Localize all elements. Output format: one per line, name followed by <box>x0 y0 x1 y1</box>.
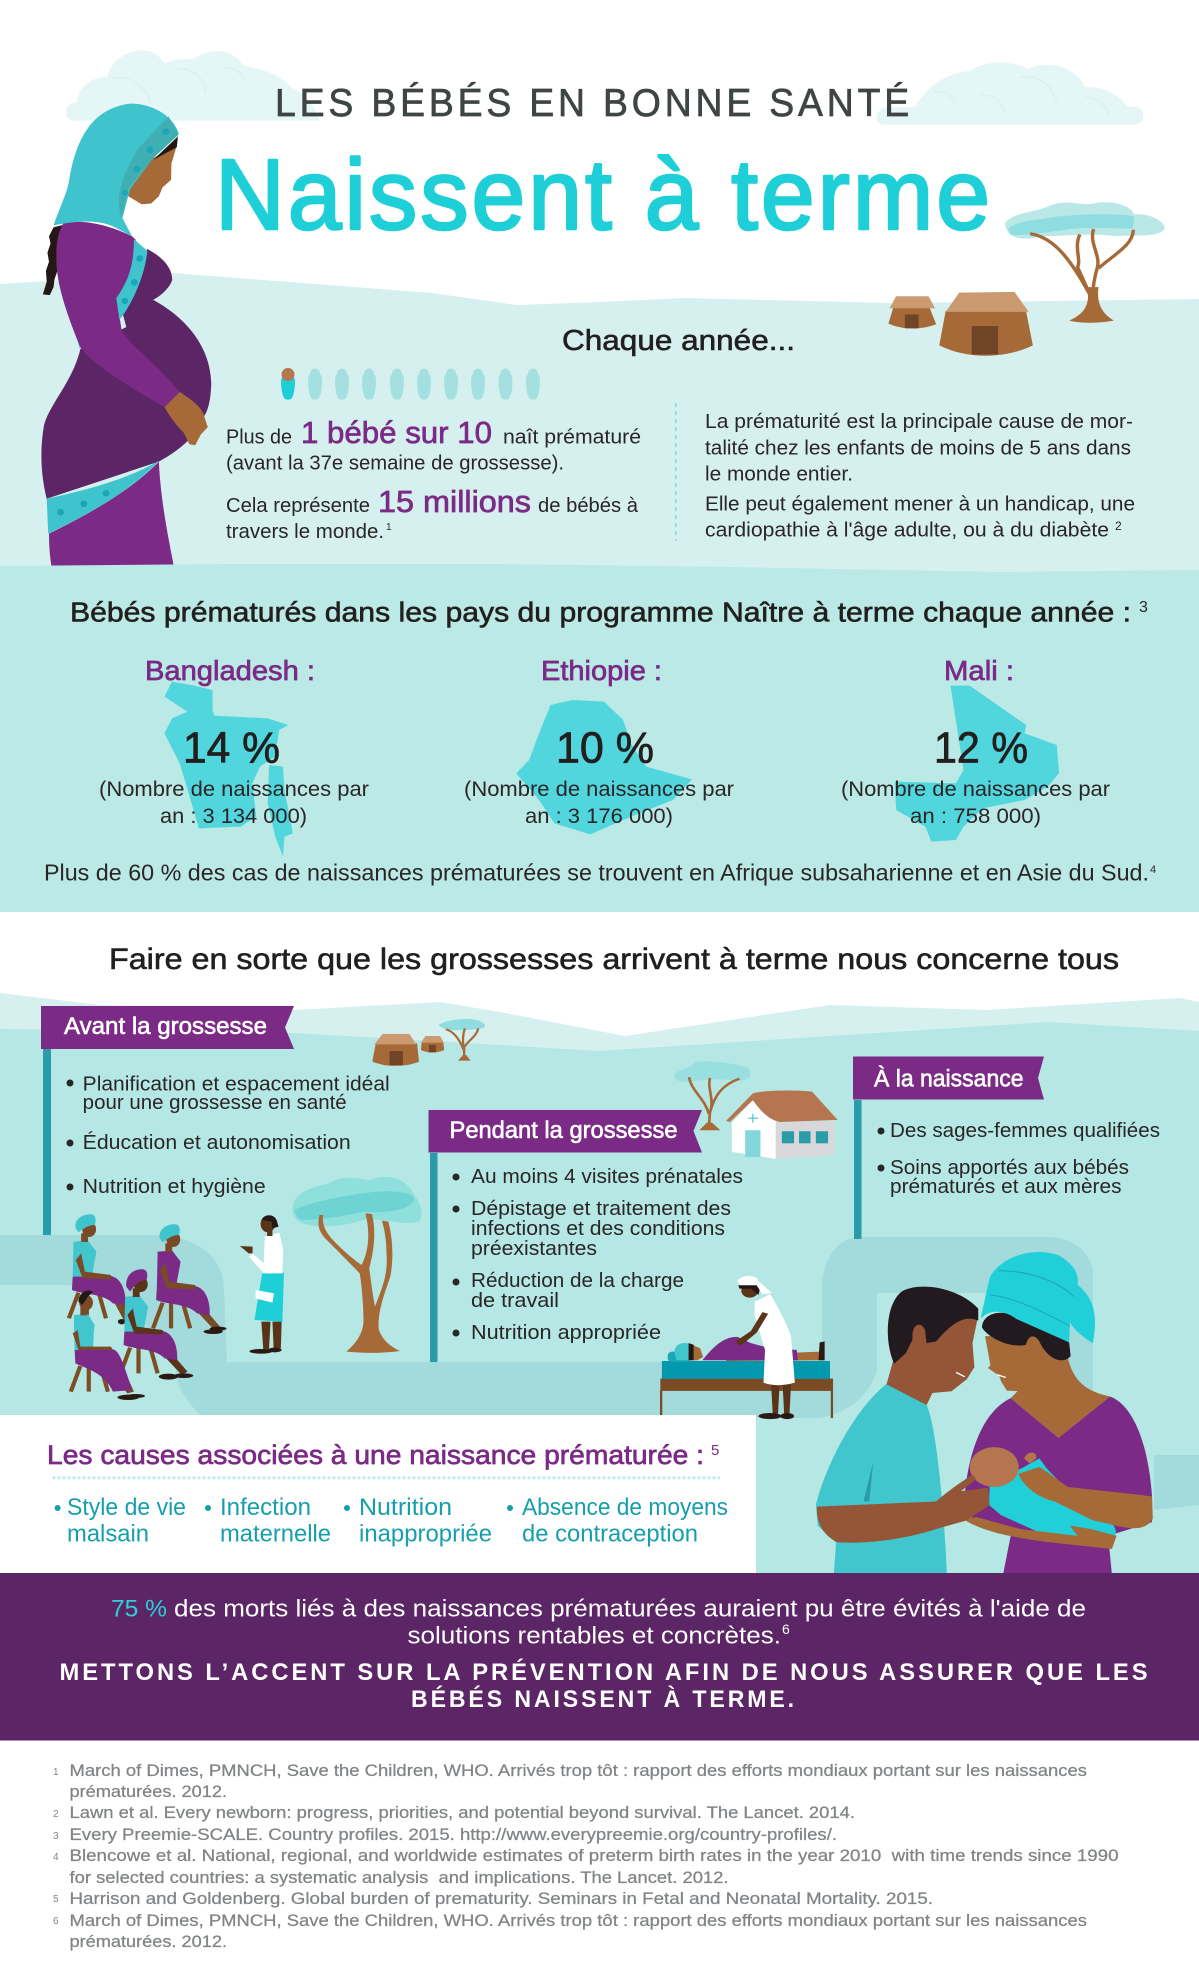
list: at birth: Soins apportés aux bébés <box>890 1157 1129 1179</box>
illustration: clinic and tree <box>674 1061 838 1159</box>
references: Lawn et al. Every newborn: progress, priorities, and potential beyond survival. The Lancet. 2014. <box>70 1804 855 1822</box>
panel: continuum of care <box>0 993 1199 1574</box>
cause: contraception: Absence de moyens <box>522 1494 728 1521</box>
stat: Bangladesh: an : 3 134 000) <box>160 805 307 828</box>
map: Mali <box>895 686 1059 842</box>
cause: infection <box>205 1494 331 1548</box>
references: Harrison and Goldenberg. Global burden of prematurity. Seminars in Fetal and Neonatal Mortality. 2015. <box>70 1890 933 1908</box>
banner: at birth <box>853 1056 1044 1100</box>
text block: 1 in 10 babies: (avant la 37e semaine de grossesse). <box>226 452 564 474</box>
list: at birth: Des sages-femmes qualifiées <box>890 1120 1160 1142</box>
text block: leading cause: cardiopathie à l'âge adulte, ou à du diabète <box>705 520 1109 542</box>
seated woman 2 <box>121 1269 193 1380</box>
map: Ethiopia <box>516 700 692 834</box>
illustration: small huts and tree <box>372 1019 485 1066</box>
list: before pregnancy: Planification et espacement idéal <box>83 1074 390 1096</box>
stat: Bangladesh: Bangladesh : <box>145 655 315 686</box>
text block: 1 in 10 babies: 1 bébé sur 10 <box>301 415 492 450</box>
list: during pregnancy: préexistantes <box>471 1238 597 1260</box>
heading: preterm babies in programme countries: 3 <box>1139 599 1148 616</box>
column: during pregnancy <box>428 1110 743 1362</box>
heading: causes: 5 <box>711 1442 719 1459</box>
stat: Ethiopia <box>464 655 734 828</box>
text block: 1 in 10 babies: travers le monde. <box>226 521 384 543</box>
statistic sentence: solutions rentables et concrètes. <box>408 1622 781 1650</box>
cause: nutrition: inappropriée <box>359 1520 492 1548</box>
references: 5 <box>53 1894 59 1905</box>
landscape hill <box>0 273 1199 572</box>
banner: at birth: À la naissance <box>874 1066 1024 1092</box>
banner: before pregnancy: Avant la grossesse <box>64 1013 267 1040</box>
stat: Ethiopia: an : 3 176 000) <box>525 805 673 828</box>
list: at birth <box>878 1120 1160 1198</box>
list: during pregnancy: infections et des conditions <box>471 1218 725 1240</box>
list: during pregnancy <box>452 1166 743 1344</box>
stat: Ethiopia: 10 % <box>556 724 654 772</box>
text block: 1 in 10 babies <box>226 415 641 543</box>
text: 60 percent of cases: Plus de 60 % des cas de naissances prématurées se trouvent en Afrique subsaharienne et en Asie du Sud. <box>44 860 1149 886</box>
heading: everyone's concern: Faire en sorte que les grossesses arrivent à terme nous concerne tous <box>109 943 1119 976</box>
cause: nutrition <box>344 1494 492 1548</box>
references: prématurées. 2012. <box>70 1933 227 1951</box>
text block: 1 in 10 babies: 15 millions <box>378 484 531 519</box>
list: during pregnancy: Au moins 4 visites prénatales <box>471 1166 743 1188</box>
banner: before pregnancy <box>41 1006 294 1049</box>
references: March of Dimes, PMNCH, Save the Children, WHO. Arrivés trop tôt : rapport des efforts mondiaux portant sur les naissances <box>70 1912 1087 1930</box>
references: March of Dimes, PMNCH, Save the Children, WHO. Arrivés trop tôt : rapport des efforts mondiaux portant sur les naissances <box>70 1762 1087 1780</box>
list: before pregnancy: pour une grossesse en santé <box>83 1092 347 1114</box>
column: before pregnancy <box>41 1006 390 1235</box>
stat: Bangladesh <box>99 655 369 828</box>
woman's arms <box>963 1467 1153 1549</box>
references: 2 <box>53 1809 59 1820</box>
stat: Mali <box>841 655 1110 828</box>
list: during pregnancy: de travail <box>471 1290 559 1312</box>
cause: lifestyle: Style de vie <box>67 1494 186 1521</box>
statistic sentence: 6 <box>782 1621 790 1637</box>
stat: Mali: (Nombre de naissances par <box>841 778 1110 801</box>
text block: 1 in 10 babies: Cela représente <box>226 495 370 517</box>
cause: nutrition: Nutrition <box>359 1494 452 1521</box>
title kicker: LES BÉBÉS EN BONNE SANTÉ <box>275 82 913 125</box>
tree <box>292 1177 422 1353</box>
man <box>816 1287 978 1574</box>
heading: causes: Les causes associées à une naissance prématurée : <box>47 1440 704 1470</box>
stat: Mali: 12 % <box>934 724 1028 772</box>
road <box>0 1235 1093 1418</box>
cloud left <box>66 50 320 121</box>
references: 1 <box>53 1767 59 1778</box>
list: during pregnancy: Réduction de la charge <box>471 1270 684 1292</box>
cause: lifestyle: malsain <box>67 1520 149 1548</box>
stat: Mali: Mali : <box>944 655 1014 686</box>
panel: call to action <box>0 1573 1199 1740</box>
seated woman 3 <box>153 1224 227 1334</box>
seated woman 4 <box>71 1291 145 1400</box>
cause: lifestyle <box>55 1494 186 1548</box>
list: before pregnancy: Éducation et autonomisation <box>83 1131 351 1154</box>
back hill <box>0 993 1199 1060</box>
text block: 1 in 10 babies: de bébés à <box>538 495 639 517</box>
illustration: women's group and health worker <box>69 1177 422 1400</box>
column: at birth <box>853 1056 1160 1239</box>
text block: leading cause: Elle peut également mener à un handicap, une <box>705 494 1135 516</box>
cloud right <box>877 62 1143 125</box>
references: 3 <box>53 1831 59 1842</box>
baby <box>970 1447 1116 1543</box>
heading: preterm babies in programme countries: Bébés prématurés dans les pays du programme Naître à terme chaque année : <box>70 596 1131 628</box>
woman <box>965 1252 1152 1574</box>
call to action: BÉBÉS NAISSENT À TERME. <box>411 1685 797 1713</box>
text block: leading cause: 2 <box>1115 519 1122 533</box>
list: at birth: prématurés et aux mères <box>890 1176 1122 1198</box>
text block: leading cause: La prématurité est la principale cause de mor- <box>705 411 1133 433</box>
statistic sentence <box>111 1596 1086 1650</box>
map: Bangladesh <box>164 682 293 857</box>
stat: Bangladesh: 14 % <box>183 724 280 772</box>
list: before pregnancy: Nutrition et hygiène <box>83 1176 266 1198</box>
cause: contraception <box>507 1494 728 1548</box>
references: for selected countries: a systematic analysis and implications. The Lancet. 2012. <box>70 1869 729 1887</box>
list: before pregnancy <box>66 1074 390 1198</box>
illustration: acacia tree and huts <box>888 202 1165 356</box>
panel: programme countries <box>0 564 1199 912</box>
illustration: couple with newborn <box>816 1252 1153 1574</box>
references: 6 <box>53 1916 59 1927</box>
panel: intro scene <box>0 50 1199 572</box>
list: during pregnancy: Dépistage et traitement des <box>471 1198 731 1220</box>
stat: Bangladesh: (Nombre de naissances par <box>99 778 369 801</box>
list: during pregnancy: Nutrition appropriée <box>471 1322 661 1344</box>
health worker <box>240 1215 284 1354</box>
text block: 1 in 10 babies: naît prématuré <box>503 426 641 448</box>
text block: leading cause <box>705 411 1135 542</box>
text block: leading cause: le monde entier. <box>705 464 853 486</box>
main title: Naissent à terme <box>215 139 993 251</box>
front hill <box>0 1022 1199 1574</box>
icon row: 1 in 10 babies <box>281 368 540 400</box>
stat: Ethiopia: Ethiopie : <box>541 655 662 686</box>
call to action <box>60 1658 1150 1713</box>
references: Every Preemie-SCALE. Country profiles. 2015. http://www.everypreemie.org/country-profiles/. <box>70 1826 837 1844</box>
stat: Mali: an : 758 000) <box>910 805 1041 828</box>
references: 4 <box>53 1852 59 1863</box>
text block: 1 in 10 babies: 1 <box>386 522 392 533</box>
stat: Ethiopia: (Nombre de naissances par <box>464 778 734 801</box>
references: Blencowe et al. National, regional, and worldwide estimates of preterm birth rates in the year 2010 with time trends since 1990 <box>70 1847 1118 1865</box>
heading: every year: Chaque année... <box>562 325 795 357</box>
illustration: midwife examining patient <box>660 1276 833 1419</box>
cause: infection: Infection <box>220 1494 311 1521</box>
panel: associated causes <box>0 1415 756 1574</box>
references: prématurées. 2012. <box>70 1783 227 1801</box>
statistic sentence: des morts liés à des naissances prématurées auraient pu être évités à l'aide de <box>174 1596 1086 1622</box>
illustration: pregnant woman <box>41 104 211 568</box>
references <box>53 1762 1118 1951</box>
banner: during pregnancy: Pendant la grossesse <box>450 1117 678 1144</box>
cause: infection: maternelle <box>220 1520 331 1548</box>
banner: during pregnancy <box>428 1110 702 1152</box>
text block: leading cause: talité chez les enfants de moins de 5 ans dans <box>705 438 1131 460</box>
man's arm <box>817 1475 990 1543</box>
text: 60 percent of cases: 4 <box>1150 864 1156 876</box>
seated woman 1 <box>69 1214 132 1324</box>
call to action: METTONS L’ACCENT SUR LA PRÉVENTION AFIN DE NOUS ASSURER QUE LES <box>60 1658 1150 1686</box>
statistic sentence: 75 % <box>111 1596 167 1622</box>
text block: 1 in 10 babies: Plus de <box>226 426 292 448</box>
cause: contraception: de contraception <box>522 1520 698 1548</box>
road right patch <box>1154 1455 1199 1510</box>
